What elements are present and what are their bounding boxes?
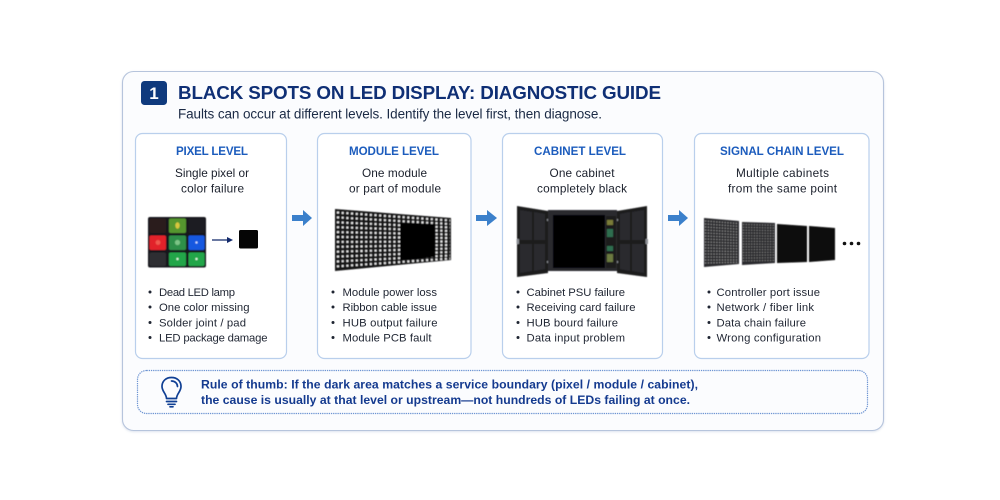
text: module level description: One module [362,166,427,180]
text: module level description [349,166,441,196]
list: pixel level causes: One color missing [159,302,250,314]
list: signal chain causes: Network / fiber link [716,302,814,314]
list: cabinet level causes: Data input problem [526,332,625,344]
arrow: module to cabinet [476,210,497,226]
badge: section number 1: 1 [149,84,159,103]
text: rule of thumb [201,378,698,407]
text: cabinet level description: completely black [537,182,627,196]
image: LED module with dark area [335,209,451,271]
text: rule of thumb: the cause is usually at that level or upstream—not hundreds of LEDs failing at once. [201,393,690,407]
text: module level description: or part of module [349,182,441,196]
image: chain of cabinets [704,218,835,267]
text: rule of thumb: Rule of thumb: If the dark area matches a service boundary (pixel / module / cabinet), [201,378,698,392]
heading: cabinet level: CABINET LEVEL [534,145,626,158]
icon: light bulb [162,378,181,407]
image: open LED cabinet [516,206,648,277]
list: pixel level causes: Dead LED lamp [159,287,235,299]
text: pixel level description [175,166,249,196]
heading: module level: MODULE LEVEL [349,145,439,158]
arrow: pixel to module [292,210,312,226]
list: signal chain causes [708,287,821,344]
text: pixel level description: color failure [181,182,244,196]
text: cabinet level description [537,166,627,196]
heading: signal chain level: SIGNAL CHAIN LEVEL [720,145,844,158]
text: pixel level description: Single pixel or [175,166,249,180]
panel: cabinet level [502,134,662,358]
icon: LED pixel grid [148,217,206,268]
arrow: cabinet to signal chain [668,210,688,226]
list: cabinet level causes: Receiving card failure [526,302,636,314]
panel: pixel level [136,134,286,358]
icon: more cabinets ellipsis [843,242,860,245]
list: module level causes [332,287,438,344]
subtitle: Faults can occur at different levels. Identify the level first, then diagnose. [178,106,602,122]
badge: section number 1 [141,81,167,105]
icon: dead black pixel [239,230,258,248]
callout: rule of thumb [138,370,868,414]
list: signal chain causes: Data chain failure [716,317,806,329]
heading: pixel level: PIXEL LEVEL [176,145,248,158]
list: module level causes: Module power loss [342,287,437,299]
text: cabinet level description: One cabinet [550,166,615,180]
list: pixel level causes: Solder joint / pad [159,317,246,329]
list: module level causes: Ribbon cable issue [342,302,437,314]
text: signal chain description: from the same point [728,182,838,196]
list: pixel level causes: LED package damage [159,332,268,344]
list: module level causes: Module PCB fault [342,332,432,344]
list: signal chain causes: Controller port issue [716,287,820,299]
list: cabinet level causes: Cabinet PSU failure [526,287,625,299]
title: BLACK SPOTS ON LED DISPLAY: DIAGNOSTIC GUIDE [178,82,661,103]
panel: signal chain level [694,134,869,358]
list: pixel level causes [148,287,268,344]
list: cabinet level causes [516,287,636,344]
panel: module level [318,134,471,358]
list: module level causes: HUB output failure [342,317,438,329]
arrow: grid to dead pixel [212,237,233,243]
text: signal chain description [728,166,838,196]
list: signal chain causes: Wrong configuration [716,332,821,344]
list: cabinet level causes: HUB bourd failure [526,317,618,329]
panel: guide container [122,72,884,430]
text: signal chain description: Multiple cabinets [736,166,829,180]
